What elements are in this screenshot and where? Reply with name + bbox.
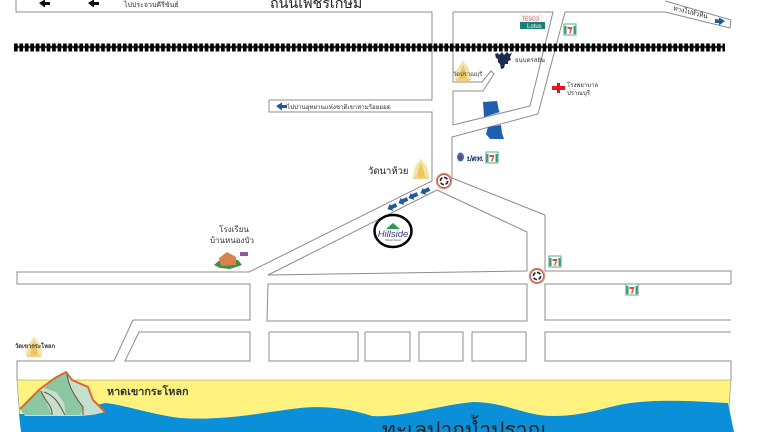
label: hospital: ปราณบุรี bbox=[567, 89, 591, 97]
sign: to national park: ไปปานอุทยานแห่งชาติเขาสามร้อยยอด bbox=[286, 103, 391, 111]
7-Eleven centre bbox=[486, 152, 498, 163]
roundabout north bbox=[436, 174, 452, 188]
beach bbox=[17, 380, 731, 420]
7-Eleven junction bbox=[549, 256, 561, 267]
7-Eleven east bbox=[626, 284, 638, 295]
blue pond north bbox=[483, 101, 500, 117]
icon: Wat Khao Krachok bbox=[26, 336, 42, 357]
label: school: โรงเรียน bbox=[219, 224, 249, 234]
label: to Hua Hin: ทางไปหัวหิน bbox=[673, 4, 709, 21]
label: Wat Khao Krachok: วัดเขากระโหลก bbox=[15, 342, 55, 350]
mountain bbox=[20, 372, 105, 416]
label: hospital: โรงพยาบาล bbox=[567, 81, 598, 89]
label: park: ธนบดรสยัน bbox=[515, 57, 545, 64]
label: Khao Krachok beach: หาดเขากระโหลก bbox=[107, 384, 189, 398]
icon: Wat Na Huai bbox=[413, 158, 429, 179]
PTT logo: ปตท. bbox=[466, 154, 484, 163]
roundabout south bbox=[530, 268, 544, 284]
PTT logo bbox=[457, 152, 484, 163]
Tesco Lotus sign: TESCO bbox=[522, 16, 539, 22]
label: to Prachuap: ไปประจวบคีรีขันธ์ bbox=[123, 0, 179, 9]
Hillside logo bbox=[374, 215, 412, 247]
arrows to Hillside bbox=[386, 185, 431, 213]
Tesco Lotus sign bbox=[520, 15, 545, 30]
arrow: west 2 bbox=[88, 0, 99, 7]
Hillside logo: Hillside Resort bbox=[385, 239, 401, 242]
icon: school bbox=[214, 252, 248, 269]
label: Wat Na Huai: วัดนาห้วย bbox=[368, 166, 408, 177]
railway bbox=[14, 46, 725, 49]
icon: hospital cross bbox=[552, 83, 565, 93]
arrow: west 1 bbox=[39, 0, 50, 7]
label: to Hua Hin bbox=[673, 4, 725, 25]
Hillside logo: Hillside bbox=[378, 229, 408, 240]
label: wat Pranburi: วัดปราณบุรี bbox=[453, 70, 482, 78]
7-Eleven top right bbox=[564, 24, 576, 35]
Tesco Lotus sign: Lotus bbox=[527, 24, 542, 30]
sea bbox=[19, 401, 734, 432]
label: school: บ้านหนองบัว bbox=[210, 236, 254, 245]
icon: park tree bbox=[495, 52, 512, 69]
blue pond south bbox=[486, 125, 504, 139]
icon: wat Pranburi bbox=[455, 60, 471, 81]
